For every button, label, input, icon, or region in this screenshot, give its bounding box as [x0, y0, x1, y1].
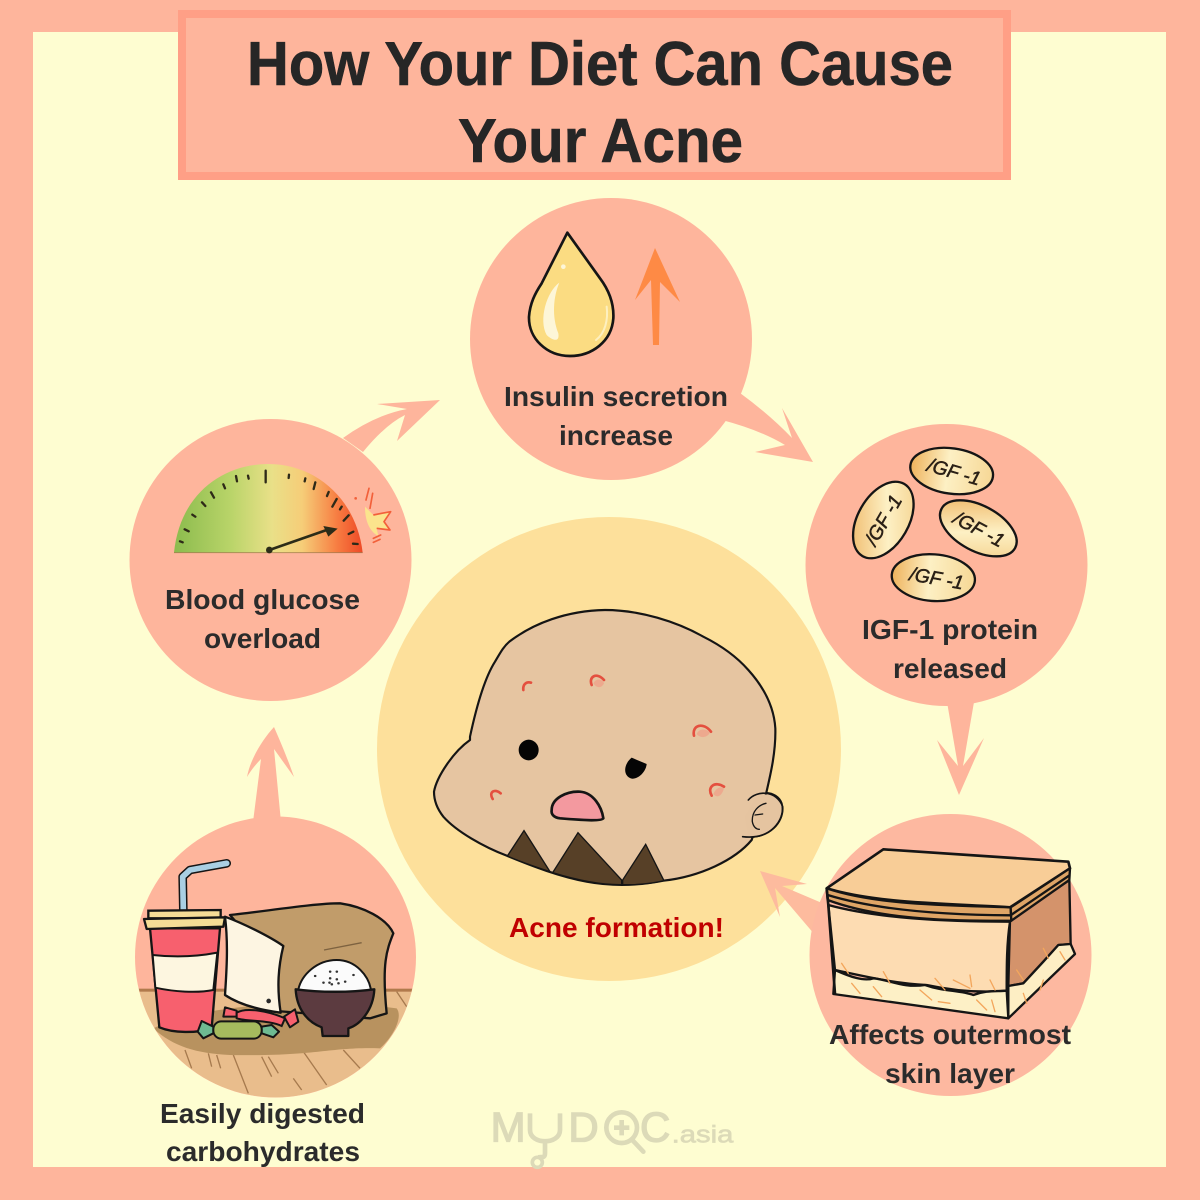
- rice bowl: [296, 989, 374, 1036]
- skin top surface: [827, 849, 1070, 907]
- icon: glucose gauge: [174, 464, 391, 553]
- icon: upward arrow: [635, 248, 680, 345]
- panel: acne formation centre: [377, 517, 841, 981]
- arrow: carbohydrates to glucose: [247, 727, 294, 822]
- pill left: [841, 471, 926, 569]
- label: glucose: overload: [204, 623, 321, 654]
- icon: sad baby face with acne: [434, 610, 783, 885]
- arrow: glucose to insulin: [343, 400, 440, 452]
- label: skin: Affects outermost: [829, 1019, 1071, 1050]
- icon: oil drop: [529, 233, 613, 356]
- skin fibres: [842, 948, 1065, 1012]
- panel: insulin secretion increase: [470, 198, 752, 480]
- arrow: skin layer to acne: [760, 871, 822, 935]
- panel: affects outermost skin layer: [810, 814, 1092, 1096]
- pill bottom: [890, 551, 977, 604]
- title line 2: Your Acne: [458, 107, 743, 176]
- skin side: [1008, 880, 1071, 986]
- label: IGF-1: released: [893, 653, 1007, 684]
- pimples: [491, 676, 724, 799]
- pill right: /GF -1: [948, 507, 1007, 552]
- skin band: [827, 888, 1011, 921]
- skin front: [828, 905, 1010, 992]
- arrow: IGF-1 to skin layer: [937, 702, 984, 795]
- panel: blood glucose overload: [130, 419, 412, 701]
- mouth: [552, 792, 603, 820]
- bread slice: [225, 917, 283, 1013]
- ear overlap: [745, 795, 782, 837]
- drink cup: [150, 928, 220, 1032]
- pill top: [907, 443, 996, 499]
- label: glucose: [165, 584, 360, 654]
- pill bottom: /GF -1: [906, 564, 965, 594]
- label: insulin: increase: [559, 420, 673, 451]
- rice: [298, 960, 371, 992]
- pill top: /GF -1: [923, 455, 983, 490]
- icon: IGF-1 pills: [841, 443, 1026, 604]
- logo: MyDOC.asia: C: [640, 1104, 670, 1151]
- label: carbohydrates: carbohydrates: [166, 1136, 360, 1167]
- icon: skin cross-section: [827, 849, 1075, 1018]
- label: IGF-1: [862, 614, 1038, 684]
- hair tufts: [507, 831, 550, 872]
- title line 1: How Your Diet Can Cause: [247, 30, 953, 99]
- label: skin: skin layer: [885, 1058, 1015, 1089]
- eyes: [519, 740, 539, 760]
- red candy: [223, 1007, 298, 1027]
- logo: MyDOC.asia: M: [491, 1104, 526, 1151]
- logo: MyDOC.asia: .asia: [672, 1121, 734, 1148]
- label: skin: [829, 1019, 1071, 1089]
- floor: [138, 988, 412, 1098]
- panel: IGF-1 protein released: [806, 424, 1088, 706]
- panel: easily digested carbohydrates: [130, 816, 430, 1167]
- green candy: [198, 1021, 279, 1038]
- label: glucose: Blood glucose: [165, 584, 360, 615]
- ear: [743, 793, 782, 837]
- pill right: [931, 489, 1026, 568]
- label: carbohydrates: Easily digested: [160, 1098, 365, 1129]
- icon: spark: [354, 488, 391, 542]
- head: [434, 610, 775, 885]
- label: acne formation: Acne formation!: [509, 912, 724, 943]
- icon: food illustration: [130, 863, 430, 1104]
- pill left: /GF -1: [861, 492, 907, 551]
- bread loaf: [230, 903, 393, 1018]
- logo: MyDOC.asia: D: [568, 1104, 599, 1151]
- label: carbohydrates: [160, 1098, 365, 1167]
- label: insulin: Insulin secretion: [504, 381, 728, 412]
- label: IGF-1: IGF-1 protein: [862, 614, 1038, 645]
- pimple shading: [593, 680, 724, 796]
- label: insulin: [504, 381, 728, 451]
- logo: MyDOC.asia: [491, 1104, 734, 1167]
- arrow: insulin to IGF-1: [722, 393, 813, 462]
- title banner: [182, 14, 1007, 176]
- straw: [183, 863, 227, 910]
